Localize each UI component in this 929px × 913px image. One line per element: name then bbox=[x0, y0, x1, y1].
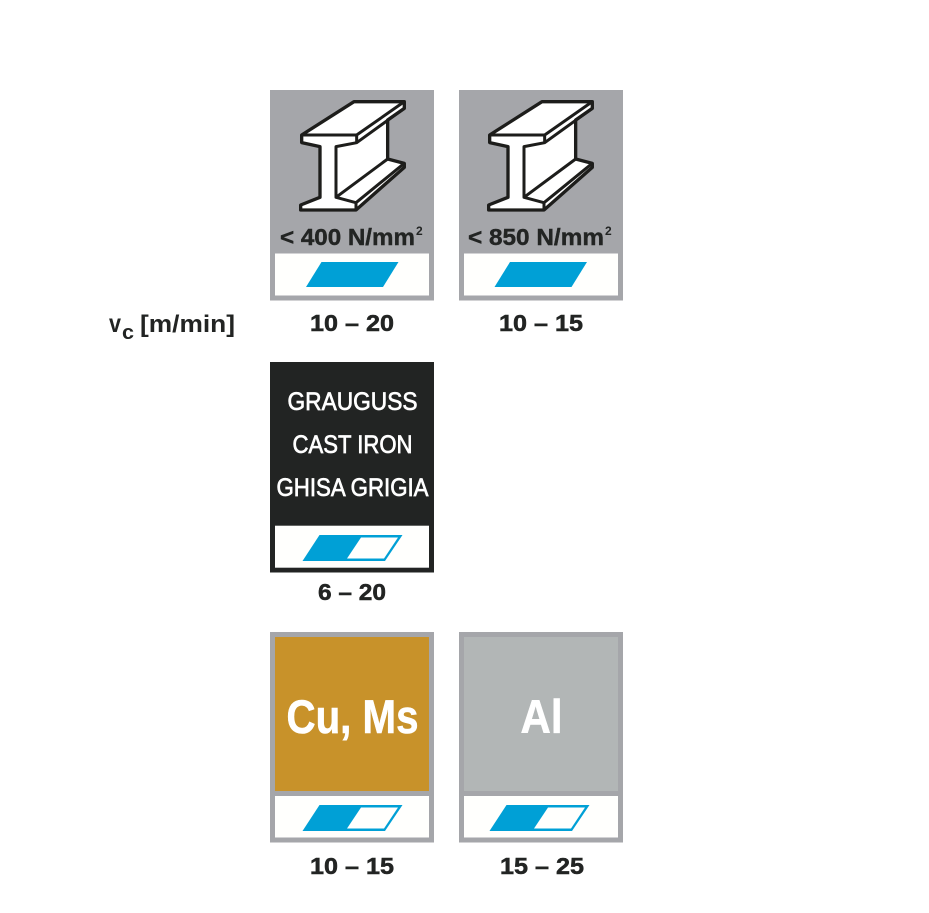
icon: half blue parallelogram bbox=[302, 805, 402, 831]
material symbol: Al bbox=[520, 690, 562, 743]
strength label: < 850 N/mm bbox=[468, 224, 604, 250]
white band bbox=[464, 796, 618, 838]
icon: half blue parallelogram bbox=[490, 805, 590, 831]
value: 10 – 15: 10 – 15 bbox=[499, 310, 583, 336]
panel: steel under 850 N/mm2: 2 bbox=[605, 224, 612, 238]
panel: cast iron bbox=[270, 362, 434, 572]
icon: half blue parallelogram bbox=[302, 535, 402, 561]
strength label: < 400 N/mm bbox=[280, 224, 415, 250]
icon: full blue parallelogram bbox=[494, 262, 587, 287]
value: 10 – 20: 10 – 20 bbox=[310, 310, 394, 336]
material names: GRAUGUSS bbox=[288, 388, 418, 416]
icon: steel I-beam bbox=[489, 102, 592, 210]
value: 15 – 25: 15 – 25 bbox=[500, 853, 584, 879]
panel: aluminium bbox=[459, 632, 623, 842]
value: 10 – 15: 10 – 15 bbox=[310, 853, 394, 879]
white band bbox=[275, 254, 429, 296]
panel: copper and brass bbox=[270, 632, 434, 842]
value: 6 – 20: 6 – 20 bbox=[318, 579, 386, 605]
material names bbox=[276, 388, 429, 502]
axis label: cutting speed: [m/min] bbox=[140, 311, 235, 338]
white band bbox=[275, 526, 429, 568]
panel: steel under 400 N/mm2: 2 bbox=[416, 224, 423, 238]
panel: steel under 850 N/mm2 bbox=[459, 90, 623, 300]
panel: steel under 400 N/mm2 bbox=[270, 90, 434, 300]
icon: steel I-beam bbox=[301, 102, 404, 210]
axis label: cutting speed: c bbox=[122, 322, 134, 344]
icon: full blue parallelogram bbox=[306, 262, 398, 287]
material names: CAST IRON bbox=[292, 431, 412, 459]
axis label: cutting speed: v bbox=[109, 308, 121, 338]
white band bbox=[464, 254, 618, 296]
axis label: cutting speed bbox=[109, 308, 235, 344]
white band bbox=[275, 796, 429, 838]
material symbol: Cu, Ms bbox=[286, 690, 418, 743]
material names: GHISA GRIGIA bbox=[276, 474, 429, 502]
